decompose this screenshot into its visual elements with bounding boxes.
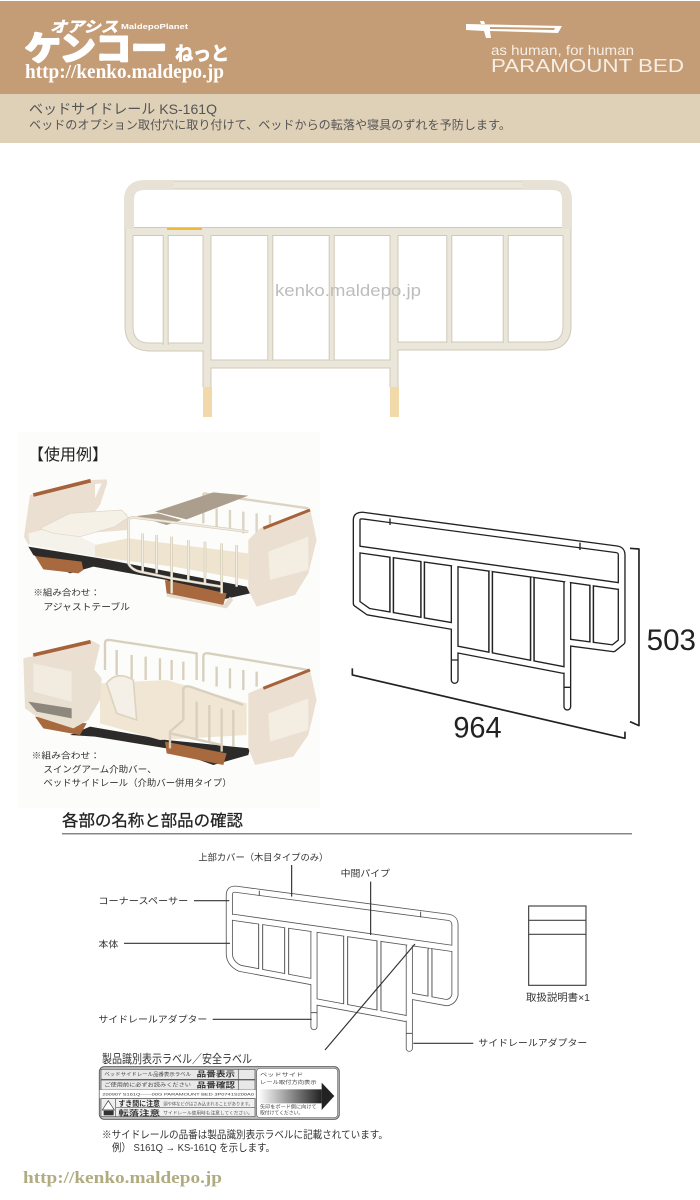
- product title band: ベッドサイドレール KS-161Q: [29, 101, 217, 117]
- usage heading: 【使用例】: [28, 446, 108, 464]
- section heading: 各部の名称と部品の確認: [62, 812, 243, 830]
- bed photo 1: アジャストテーブル: [43, 601, 130, 612]
- product label sample: ベッドサイドレール品番表示ラベル: [104, 1071, 191, 1078]
- dimension: width: 964: [453, 712, 502, 745]
- product label sample: 200907 S161Q------00G PARAMOUNT BED 3P0741S200A0: [102, 1092, 255, 1097]
- header band: [0, 1, 700, 94]
- product label sample: レール取付方向表示: [260, 1079, 317, 1086]
- parts diagram: [98, 852, 587, 1050]
- panel: usage examples: [18, 432, 320, 808]
- part labels: [98, 852, 587, 1048]
- product label sample: [99, 1067, 339, 1119]
- manual label: 取扱説明書×1: [526, 991, 590, 1004]
- brand logo: Paramount Bed: PARAMOUNT BED: [491, 56, 684, 76]
- product label sample: ご使用前に必ずお読みください: [104, 1082, 191, 1089]
- site logo: ケンコー: [25, 30, 167, 67]
- product label sample: 取付けてください。: [260, 1110, 303, 1117]
- dimension: height: 503: [647, 624, 696, 657]
- site logo: ねっと: [175, 43, 229, 65]
- part labels: コーナースペーサー: [98, 896, 188, 906]
- part labels: サイドレールアダプター: [98, 1014, 207, 1025]
- footnote: [102, 1128, 388, 1154]
- leader lines: [124, 865, 473, 1050]
- part labels: 本体: [98, 939, 119, 950]
- product label sample: すき間に注意: [118, 1099, 161, 1108]
- product title band: [0, 94, 700, 143]
- footnote: 例） S161Q → KS-161Q を示します。: [112, 1141, 275, 1154]
- product label sample: ベッドサイド: [260, 1073, 303, 1079]
- product label sample: 頭や体などがはさみ込まれることがあります。: [163, 1100, 253, 1107]
- part labels: 上部カバー（木目タイプのみ）: [198, 852, 328, 863]
- product label sample: 矢印をボード側に向けて: [260, 1104, 317, 1111]
- part labels: サイドレールアダプター: [478, 1037, 587, 1048]
- manual icon: [526, 906, 590, 1004]
- site logo: [25, 19, 229, 83]
- part labels: 中間パイプ: [341, 868, 391, 879]
- bed photo 2: ベッドサイドレール（介助バー併用タイプ）: [43, 777, 232, 788]
- site logo: オアシス: [49, 19, 121, 36]
- product label sample: 品番表示: [197, 1070, 235, 1079]
- site logo: MaldepoPlanet: [121, 22, 189, 31]
- bed photo 1: [24, 479, 317, 612]
- product label heading: 製品識別表示ラベル／安全ラベル: [102, 1052, 252, 1066]
- product title band: ベッドのオプション取付穴に取り付けて、ベッドからの転落や寝具のずれを予防します。: [29, 117, 511, 132]
- caption: ※組み合わせ：: [32, 749, 100, 760]
- caption: ※組み合わせ：: [33, 587, 100, 598]
- watermark: kenko.maldepo.jp: [275, 281, 421, 300]
- brand logo: Paramount Bed: [466, 21, 684, 76]
- bed photo 2: スイングアーム介助バー、: [43, 764, 157, 775]
- dimension drawing: [352, 516, 696, 745]
- footnote: ※サイドレールの品番は製品識別表示ラベルに記載されています。: [102, 1128, 388, 1141]
- footer url: http://kenko.maldepo.jp: [23, 1168, 222, 1187]
- site logo: http://kenko.maldepo.jp: [25, 61, 224, 83]
- brand logo: Paramount Bed: as human, for human: [491, 42, 634, 58]
- product label sample: 品番確認: [197, 1080, 236, 1089]
- product label sample: 転落注意: [118, 1108, 161, 1117]
- product label sample: サイドレール使用時も注意してください。: [163, 1110, 253, 1117]
- product photo: side rail: [129, 185, 567, 417]
- bed photo 2: [23, 640, 317, 788]
